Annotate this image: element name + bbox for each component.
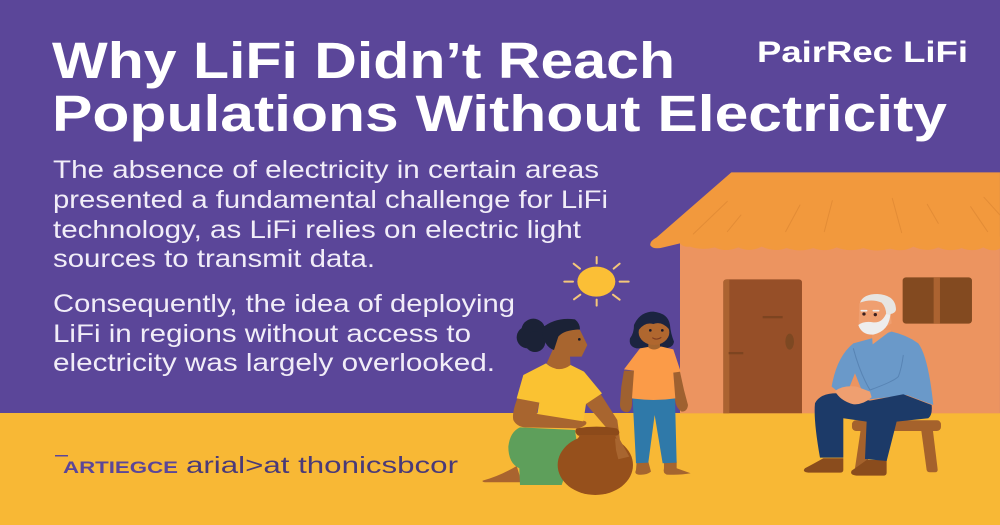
head — [859, 299, 892, 334]
window — [903, 277, 972, 324]
eyes — [649, 329, 652, 332]
back hair — [630, 312, 674, 348]
house wall — [680, 237, 1000, 413]
figure: elderly man on stool — [804, 294, 941, 476]
paragraph 1: presented a fundamental challenge for LiFi — [53, 186, 608, 214]
trousers — [815, 393, 932, 461]
icon: sun — [564, 257, 629, 306]
title — [52, 32, 948, 142]
sweater — [832, 332, 933, 405]
thatched roof — [650, 172, 1000, 251]
shoes — [804, 458, 843, 473]
fringe — [639, 313, 669, 330]
neck — [648, 342, 660, 349]
eyebrows — [861, 308, 879, 313]
legs and feet — [635, 462, 651, 475]
footer source line: ARTIEGCE — [63, 458, 178, 477]
paragraph 1: The absence of electricity in certain areas — [53, 156, 599, 184]
paragraph 2: Consequently, the idea of deploying — [53, 290, 515, 318]
paragraph 1: sources to transmit data. — [53, 245, 375, 273]
figure: girl — [620, 312, 691, 475]
paragraph 2: LiFi in regions without access to — [53, 320, 471, 348]
footer source line — [55, 452, 458, 478]
title: Populations Without Electricity — [52, 85, 948, 142]
footer source line: arial>at thonicsbcor — [186, 452, 458, 478]
eyes — [862, 312, 866, 316]
arms — [620, 371, 635, 412]
door — [723, 279, 802, 413]
hands — [835, 386, 872, 404]
hair — [542, 319, 580, 350]
pants — [633, 398, 677, 463]
skirt — [508, 427, 577, 485]
paragraph 1 — [53, 156, 608, 273]
hair — [860, 294, 896, 321]
blouse — [517, 363, 602, 421]
figure: kneeling woman with pot — [482, 319, 633, 495]
ground — [0, 413, 1000, 525]
shirt — [624, 347, 681, 400]
paragraph 1: technology, as LiFi relies on electric light — [53, 216, 581, 244]
far arm — [513, 398, 586, 428]
neck — [872, 330, 892, 344]
brand name: PairRec LiFi — [757, 36, 968, 69]
clay pot — [558, 427, 633, 495]
hair bun — [517, 319, 545, 352]
foot — [482, 466, 522, 482]
stool — [852, 420, 941, 472]
paragraph 2: electricity was largely overlooked. — [53, 349, 495, 377]
neck and face — [547, 328, 587, 373]
beard — [858, 314, 890, 335]
house — [650, 172, 1000, 413]
face — [639, 320, 669, 345]
hand on pot — [615, 438, 629, 459]
paragraph 2 — [53, 290, 515, 377]
title: Why LiFi Didn’t Reach — [52, 32, 675, 89]
